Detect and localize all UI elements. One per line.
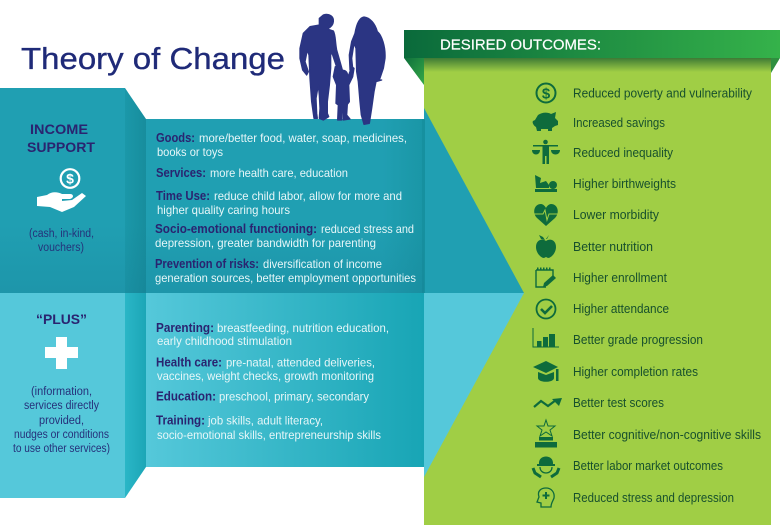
outcome: reduced poverty (536, 84, 753, 102)
text: training: Training: (156, 414, 205, 428)
outcome: better labor market (533, 456, 723, 477)
panel: income support: SUPPORT (27, 139, 95, 155)
outcome: increased savings: Increased savings (573, 116, 665, 130)
outcome: higher completion rates (533, 361, 698, 382)
icon: plus cross (45, 337, 78, 369)
father (300, 14, 342, 120)
text: socio-emotional functioning: Socio-emotional functioning: (155, 222, 317, 236)
text: socio-emotional functioning: depression, greater bandwidth for parenting (155, 236, 376, 250)
text: services (156, 166, 348, 180)
text: prevention of risks: Prevention of risks: (155, 257, 259, 271)
text: training: socio-emotional skills, entrepreneurship skills (157, 428, 381, 442)
text: training (156, 414, 381, 442)
panel: plus: to use other services) (13, 443, 110, 455)
text: goods: books or toys (157, 145, 223, 159)
panel: desired outcomes (404, 30, 780, 525)
text: services: more health care, education (210, 166, 348, 180)
panel: plus: services directly (24, 400, 99, 412)
text: services: Services: (156, 166, 206, 180)
outcome: higher completion rates: Higher completion rates (573, 365, 698, 379)
note: (information, (31, 386, 92, 398)
panel: income support: vouchers) (38, 242, 84, 254)
text: time use: reduce child labor, allow for more and (214, 189, 402, 203)
panel: plus (0, 293, 146, 498)
text: education (156, 390, 369, 404)
text: prevention of risks (155, 257, 416, 285)
text: socio-emotional functioning (155, 222, 414, 250)
text: parenting (156, 321, 389, 348)
outcome: better grade progression (533, 328, 703, 347)
right ribbon fold (771, 58, 780, 73)
outcome: better test scores (534, 396, 664, 410)
icon: hand holding coin: $ (66, 170, 74, 186)
outcome: better labor market: Better labor market outcomes (573, 459, 723, 473)
header shadow (424, 58, 771, 72)
header band (404, 30, 780, 58)
outcome: higher enrollment (536, 268, 667, 287)
text: time use: Time Use: (156, 189, 210, 203)
panel: plus pathways (146, 293, 524, 477)
text: time use: higher quality caring hours (157, 203, 290, 217)
text: parenting: Parenting: (156, 321, 214, 335)
outcomes list (532, 84, 761, 507)
text: training: job skills, adult literacy, (207, 414, 323, 428)
green panel body (424, 58, 771, 525)
text: health care: Health care: (156, 356, 222, 370)
text: prevention of risks: diversification of income (263, 257, 382, 271)
outcome: better cognitive skills: Better cognitive/non-cognitive skills (573, 428, 761, 442)
outcome: reduced inequality (532, 140, 674, 164)
outcome: lower morbidity: Lower morbidity (573, 208, 660, 222)
text: goods: more/better food, water, soap, medicines, (199, 131, 407, 145)
text: health care: pre-natal, attended deliveries, (226, 356, 375, 370)
heading: “PLUS” (36, 311, 87, 327)
child (333, 67, 354, 120)
outcome: better cognitive skills (535, 420, 761, 448)
text: socio-emotional functioning: reduced stress and (321, 222, 414, 236)
text: parenting: breastfeeding, nutrition education, (217, 321, 389, 335)
outcome: reduced stress (537, 488, 734, 507)
text: health care: vaccines, weight checks, growth monitoring (157, 369, 374, 383)
outcome: higher birthweights (535, 175, 676, 192)
mother (349, 17, 385, 124)
outcome: higher birthweights: Higher birthweights (573, 177, 676, 191)
panel: income support (0, 88, 146, 293)
outcome: lower morbidity (534, 204, 660, 226)
icon: hand holding coin (37, 169, 86, 212)
text: education: preschool, primary, secondary (219, 390, 369, 404)
outcome: reduced poverty: Reduced poverty and vulnerability (573, 86, 753, 100)
outcome: higher attendance: Higher attendance (573, 302, 669, 316)
outcome: reduced stress: Reduced stress and depression (573, 491, 734, 505)
panel: income support pathways (0, 108, 524, 293)
outcome: increased savings (533, 112, 665, 131)
panel: plus: provided, (39, 415, 84, 427)
text: health care (156, 356, 375, 383)
heading: DESIRED OUTCOMES: (440, 38, 601, 54)
outcome: better test scores: Better test scores (573, 396, 664, 410)
heading: INCOME (30, 121, 88, 137)
text: education: Education: (156, 390, 216, 404)
text: goods (156, 131, 407, 159)
title: Theory of Change (21, 41, 285, 76)
text: goods: Goods: (156, 131, 195, 145)
text: time use (156, 189, 402, 217)
left ribbon fold (404, 58, 424, 85)
outcome: higher attendance (536, 300, 669, 318)
outcome: reduced inequality: Reduced inequality (573, 146, 674, 160)
outcome: better nutrition: Better nutrition (573, 240, 653, 254)
note: (cash, in-kind, (29, 228, 94, 240)
icon: family silhouette (300, 14, 385, 124)
outcome: better grade progression: Better grade progression (573, 333, 703, 347)
outcome: higher enrollment: Higher enrollment (573, 271, 667, 285)
outcome: better nutrition (536, 235, 653, 258)
panel: plus: nudges or conditions (14, 429, 109, 441)
outcome: reduced poverty: $ (542, 86, 551, 102)
text: prevention of risks: generation sources, better employment opportunities (155, 271, 416, 285)
text: parenting: early childhood stimulation (157, 334, 292, 348)
